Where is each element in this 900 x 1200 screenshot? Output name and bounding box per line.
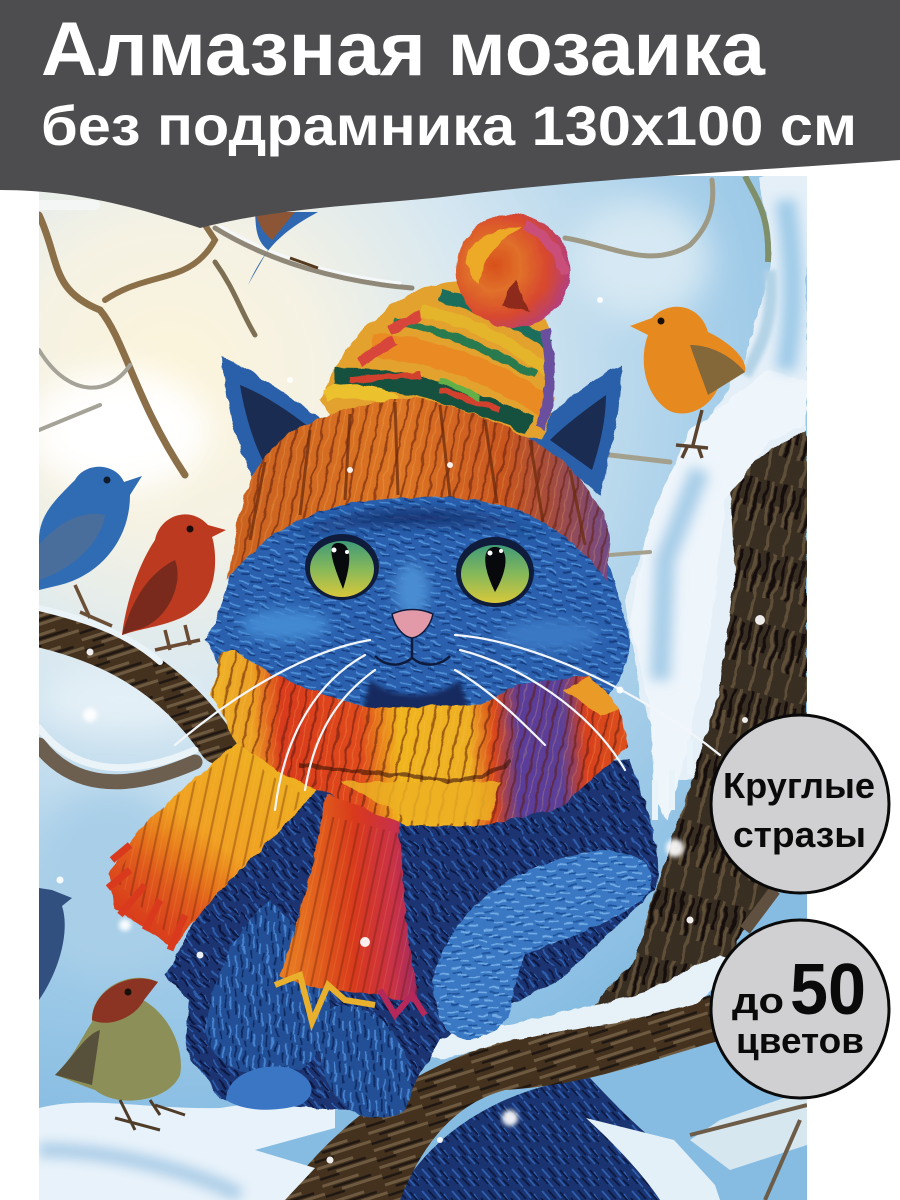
cat right ear xyxy=(525,365,621,495)
badge: up to 50 colours: 50 xyxy=(790,950,866,1030)
cat left ear xyxy=(222,356,320,478)
scarf left tail xyxy=(108,735,317,950)
title line 1: Алмазная мозаика xyxy=(41,7,766,92)
hat knitted band xyxy=(227,397,610,582)
bird: blue left xyxy=(39,467,142,626)
badge: up to 50 colours xyxy=(711,920,889,1098)
snow on lower left branch xyxy=(39,1099,335,1200)
hat band rib lines xyxy=(250,402,585,545)
bare branches top left xyxy=(39,180,713,555)
cat rear paw xyxy=(226,1067,311,1110)
bird: orange xyxy=(630,307,745,458)
badge: round rhinestones: стразы xyxy=(733,814,866,855)
cat body xyxy=(165,760,658,1110)
badge: up to 50 colours: до xyxy=(732,980,784,1021)
badge: round rhinestones: Круглые xyxy=(723,765,875,806)
tree trunk and snow on the right xyxy=(590,176,807,1010)
cat whiskers xyxy=(175,635,720,810)
bird: blue top xyxy=(248,212,318,285)
head fur xyxy=(204,496,630,707)
falling snowflakes xyxy=(56,297,784,1164)
header banner xyxy=(0,0,900,228)
knitted hat crown xyxy=(320,281,554,440)
painting: blue cat in a knitted hat and scarf with birds xyxy=(30,176,807,1200)
cat nose and mouth xyxy=(375,610,450,665)
cat front leg centre xyxy=(317,1006,412,1119)
bird: red xyxy=(122,514,226,650)
bottom right small branches xyxy=(690,890,807,1200)
hat pompom xyxy=(456,214,570,328)
bird: olive small xyxy=(55,978,185,1130)
bird: left edge xyxy=(39,888,72,1000)
cat xyxy=(108,214,720,1119)
cat right eye xyxy=(456,537,534,607)
scarf centre tail xyxy=(275,795,425,1022)
dark shadow cat below branch xyxy=(400,1078,660,1200)
badge: up to 50 colours: цветов xyxy=(736,1020,864,1061)
large branch under the cat xyxy=(280,955,740,1200)
cat arm and paw on branch xyxy=(433,851,652,1040)
face shading xyxy=(240,510,600,712)
badge: round rhinestones xyxy=(711,715,889,893)
cat left eye xyxy=(305,534,379,600)
winter sky background xyxy=(30,176,807,1200)
left branches behind the birds xyxy=(39,608,218,782)
title line 2: без подрамника 130х100 см xyxy=(41,94,857,157)
cat left haunch xyxy=(205,900,331,1074)
knitted scarf wrap xyxy=(211,651,628,826)
